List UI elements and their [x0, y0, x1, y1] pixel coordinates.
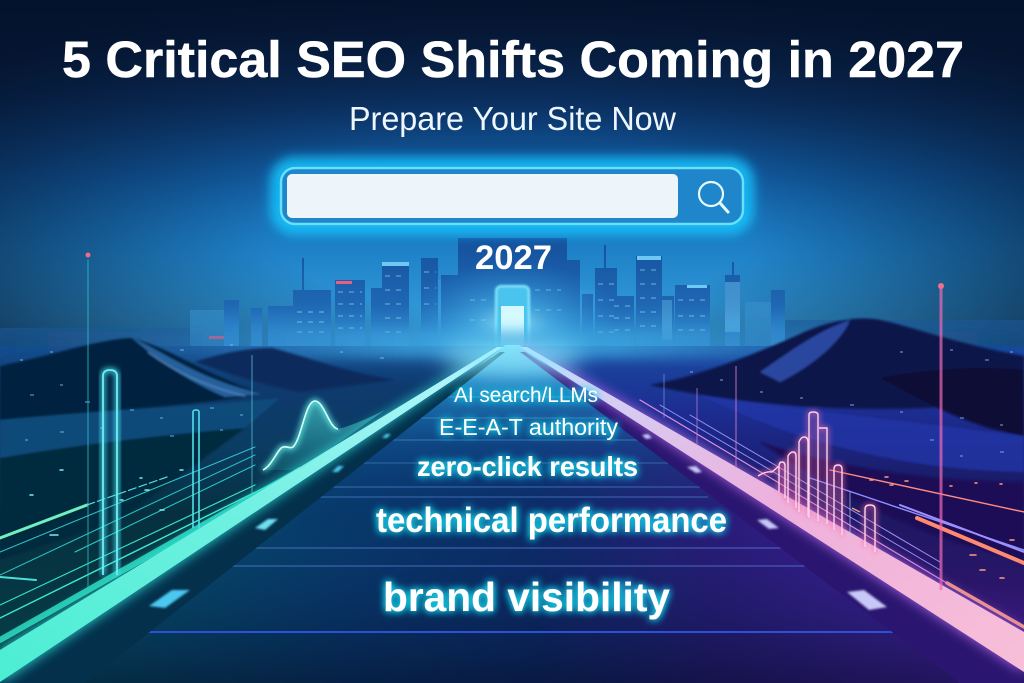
horizon road glow: [442, 340, 582, 376]
icon: magnifying glass: [699, 182, 728, 212]
right data streaks: [640, 400, 1024, 627]
search bar outer glow: [278, 165, 746, 227]
shift 5: brand visibility: [383, 574, 670, 620]
shift 3: zero-click results: [417, 451, 638, 482]
left neon rail: [0, 347, 503, 682]
right hills: [650, 319, 1024, 560]
title: 5 Critical SEO Shifts Coming in 2027: [62, 31, 964, 88]
road lighting overlay: [85, 345, 960, 683]
land left: [0, 346, 505, 683]
shift 2: E-E-A-T authority: [439, 414, 618, 440]
gateway glow at horizon: [402, 260, 622, 390]
shift 4: technical performance: [376, 501, 727, 540]
search bar frame: [281, 168, 743, 224]
road cross lines: [143, 397, 893, 632]
right marker light: [938, 283, 944, 289]
left chart: glowing curve: [263, 401, 385, 470]
left rail markers: [149, 434, 391, 608]
right rail markers: [642, 434, 887, 610]
search input field: [287, 174, 678, 218]
left chart: pillars: [88, 260, 252, 587]
shift list on road: [376, 383, 727, 620]
right neon rail glow: [520, 347, 1024, 672]
shift 1: AI search/LLMs: [454, 383, 598, 407]
left neon rail glow: [0, 347, 503, 683]
gateway portal: [496, 286, 529, 348]
vignette: [0, 0, 1024, 360]
search bar: [278, 165, 746, 227]
right chart: neon bars: [758, 412, 875, 552]
subtitle: Prepare Your Site Now: [349, 100, 676, 137]
road dark shoulders: [0, 352, 1024, 683]
left data streaks: [0, 447, 300, 640]
year label: 2027: [475, 239, 552, 277]
left land texture dots: [20, 345, 384, 440]
distant city skyline: [0, 238, 1024, 349]
horizon haze: [0, 332, 1024, 358]
right vertical light lines: [664, 288, 941, 590]
right land texture dots: [690, 350, 1013, 456]
right neon rail: [520, 347, 1024, 672]
land right: [520, 346, 1024, 683]
road surface: [85, 345, 960, 683]
left hills: [0, 338, 395, 560]
left marker light: [86, 252, 90, 258]
